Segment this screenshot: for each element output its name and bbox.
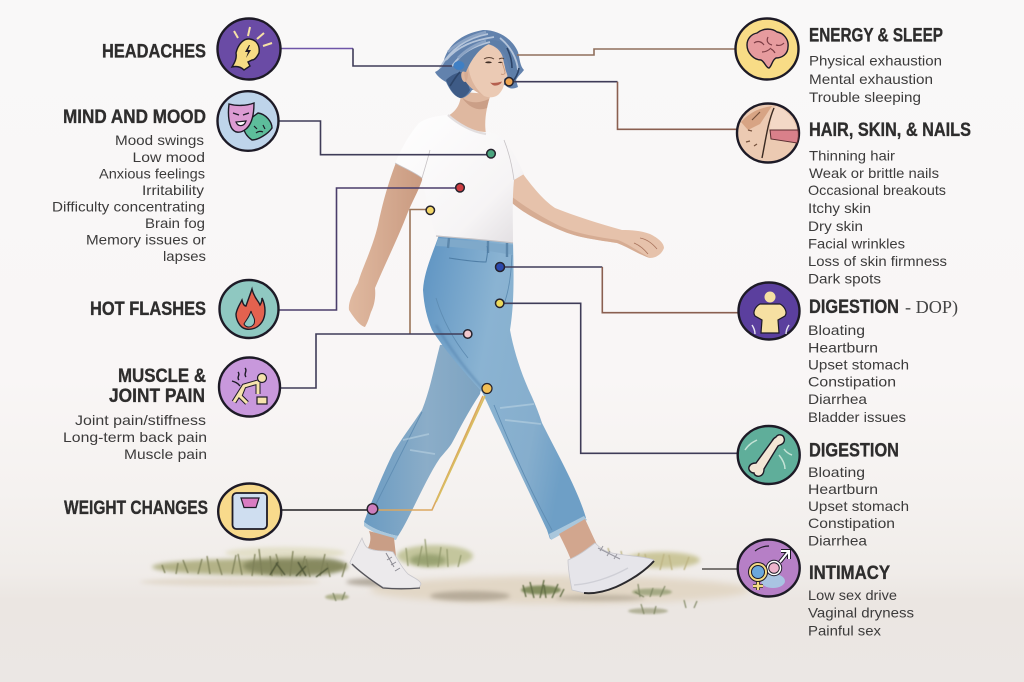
symptom list: Bloating	[808, 464, 865, 480]
icon: headache	[218, 18, 280, 80]
symptom list: Anxious feelings	[99, 166, 205, 182]
symptom list: Diarrhea	[808, 391, 867, 407]
symptom list: Vaginal dryness	[808, 605, 914, 621]
symptom list: Diarrhea	[808, 533, 867, 549]
heading: MUSCLE &	[118, 365, 206, 387]
panel: intimacy	[738, 540, 914, 639]
symptom list: Low sex drive	[808, 587, 897, 603]
symptom list: Physical exhaustion	[809, 53, 942, 69]
symptom list: Upset stomach	[808, 498, 909, 514]
panel: hot flashes	[90, 280, 278, 338]
symptom list	[52, 132, 206, 264]
symptom list: Joint pain/stiffness	[75, 412, 206, 428]
near leg and hips	[423, 235, 586, 539]
shirt	[395, 115, 524, 243]
symptom list: Low mood	[132, 149, 205, 165]
icon: scale	[218, 484, 281, 540]
heading: JOINT PAIN	[109, 385, 205, 407]
heading: - DOP)	[905, 297, 958, 318]
symptom list: Bloating	[808, 322, 865, 338]
symptom list: Upset stomach	[808, 356, 909, 372]
panel: hair, skin and nails	[737, 104, 971, 287]
icon: person holding hips	[738, 282, 800, 340]
symptom list: Long-term back pain	[63, 429, 207, 445]
face	[464, 44, 507, 97]
heading: INTIMACY	[809, 562, 890, 584]
far leg	[364, 340, 490, 536]
symptom list: Constipation	[808, 515, 895, 531]
symptom list	[808, 322, 909, 425]
facial features	[484, 58, 504, 59]
symptom list	[63, 412, 207, 462]
icon: brain	[736, 18, 798, 80]
shoes	[350, 538, 421, 588]
heading: WEIGHT CHANGES	[64, 497, 208, 519]
symptom list	[808, 464, 909, 549]
far arm	[349, 160, 423, 327]
panel: mind and mood	[52, 91, 278, 264]
symptom list: Heartburn	[808, 340, 878, 356]
hair front	[456, 40, 518, 86]
panel: headaches	[102, 18, 280, 80]
ground with grass	[140, 539, 750, 614]
symptom list	[808, 587, 914, 639]
symptom list: Thinning hair	[809, 148, 895, 164]
symptom list: Weak or brittle nails	[809, 165, 939, 181]
icon: theatre masks	[218, 91, 278, 151]
hair clip	[454, 61, 464, 70]
ankles	[368, 531, 396, 556]
symptom list: Irritability	[142, 182, 204, 198]
symptom list: Mental exhaustion	[809, 71, 933, 87]
symptom list	[808, 148, 947, 287]
symptom list: Memory issues or	[86, 232, 206, 248]
symptom list: Facial wrinkles	[808, 236, 905, 252]
symptom list: Brain fog	[145, 215, 205, 231]
panel: energy and sleep	[736, 18, 943, 105]
symptom list: lapses	[163, 248, 206, 264]
symptom list: Dark spots	[808, 271, 881, 287]
icon: flame	[220, 280, 278, 338]
near arm	[511, 174, 664, 258]
symptom list: Trouble sleeping	[809, 89, 921, 105]
marker dots	[367, 78, 513, 514]
symptom list: Constipation	[808, 374, 896, 390]
heading: ENERGY & SLEEP	[809, 25, 943, 47]
symptom list: Muscle pain	[124, 446, 207, 462]
symptom list: Loss of skin firmness	[808, 253, 947, 269]
heading: DIGESTION	[809, 440, 899, 462]
hair back	[435, 30, 524, 98]
icon: gender symbols	[738, 540, 800, 596]
woman figure	[349, 30, 664, 593]
heading: HEADACHES	[102, 40, 206, 62]
heading	[109, 365, 206, 407]
symptom list: Itchy skin	[808, 200, 871, 216]
connector lines	[279, 48, 738, 569]
symptom list	[809, 53, 942, 105]
symptom list: Occasional breakouts	[808, 182, 946, 198]
panel: digestion with bladder issues	[738, 282, 958, 425]
trouser cuffs	[364, 516, 587, 540]
symptom list: Difficulty concentrating	[52, 198, 205, 214]
symptom list: Dry skin	[808, 218, 863, 234]
symptom list: Mood swings	[115, 132, 204, 148]
symptom list: Painful sex	[808, 623, 881, 639]
neck	[448, 92, 491, 134]
symptom list: Bladder issues	[808, 409, 906, 425]
heading: HAIR, SKIN, & NAILS	[809, 119, 971, 141]
heading: MIND AND MOOD	[63, 106, 206, 128]
jeans details	[436, 238, 513, 255]
icon: skin close-up	[737, 104, 799, 162]
panel: digestion	[738, 426, 909, 549]
heading: DIGESTION	[809, 296, 899, 318]
heading: HOT FLASHES	[90, 298, 206, 320]
panel: weight changes	[64, 484, 281, 540]
icon: person lifting	[219, 358, 280, 416]
symptom list: Heartburn	[808, 481, 878, 497]
panel: muscle and joint pain	[63, 358, 280, 462]
icon: bone	[738, 426, 800, 484]
